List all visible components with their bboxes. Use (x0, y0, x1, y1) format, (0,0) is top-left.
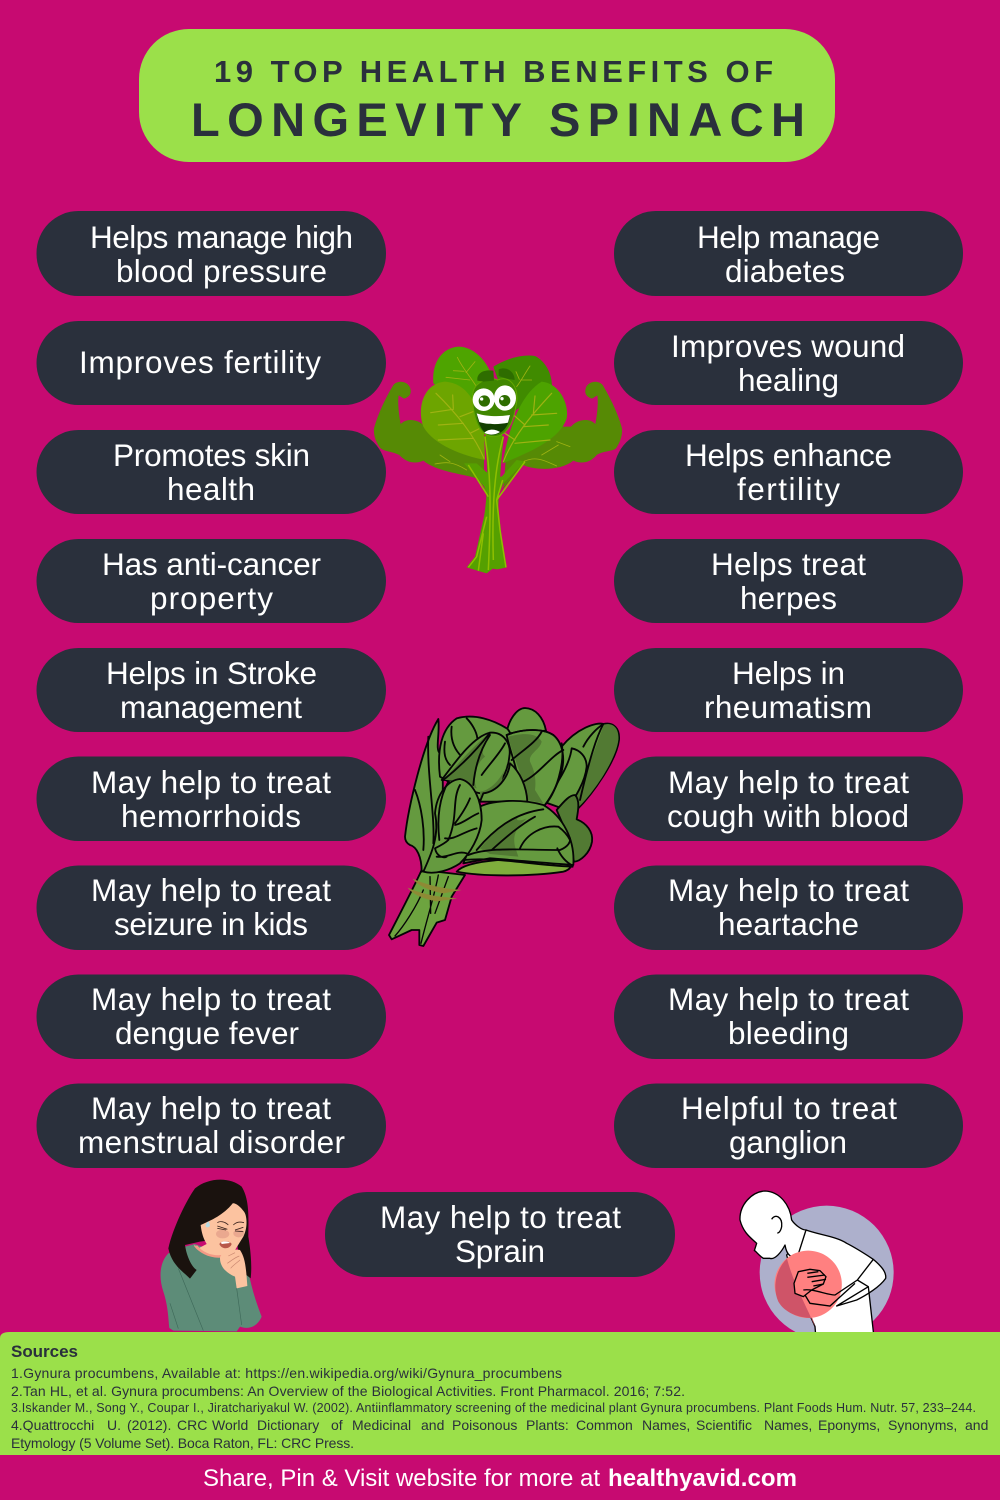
benefit: May help to treat dengue fever: dengue fever (115, 1015, 299, 1051)
benefit: Improves wound healing: healing (738, 362, 839, 398)
benefit: Improves fertility: Improves fertility (79, 344, 321, 380)
benefit: Helps in rheumatism: rheumatism (704, 689, 872, 725)
benefit: Improves wound healing: Improves wound (671, 328, 905, 364)
benefit: May help to treat seizure in kids (36, 866, 386, 950)
benefit: Helps enhance fertility: fertility (737, 471, 840, 507)
benefit: Helps in Stroke management: Helps in Stroke (106, 655, 317, 691)
reference 4: Medicinal (352, 1417, 411, 1433)
icon: flexing spinach mascot (374, 347, 622, 573)
benefit: May help to treat hemorrhoids: hemorrhoids (121, 798, 301, 834)
benefit: May help to treat heartache: May help to treat (668, 872, 909, 908)
benefit: Helps enhance fertility (614, 430, 963, 514)
reference 3: 3.Iskander M., Song Y., Coupar I., Jiratchariyakul W. (2002). Antiinflammatory screening of the medicinal plant Gynura procumbens. Plant Foods Hum. Nutr. 57, 233–244. (11, 1401, 976, 1415)
title banner: LONGEVITY SPINACH (191, 93, 805, 146)
reference 4: Scientific (696, 1417, 752, 1433)
benefit: May help to treat cough with blood (614, 756, 963, 841)
reference 4: and (421, 1417, 444, 1433)
reference 4: Eponyms, (818, 1417, 880, 1433)
reference 4: Names, (642, 1417, 690, 1433)
benefit: May help to treat seizure in kids: May help to treat (91, 872, 331, 908)
benefit: May help to treat heartache (614, 866, 963, 950)
icon: man with chest pain (740, 1191, 894, 1347)
reference 2: 2.Tan HL, et al. Gynura procumbens: An Overview of the Biological Activities. Front Pharmacol. 2016; 7:52. (11, 1383, 685, 1399)
benefit: Improves fertility (36, 321, 386, 405)
benefit: May help to treat hemorrhoids (36, 756, 386, 841)
reference 4: (2012). (127, 1417, 171, 1433)
benefit: May help to treat Sprain: Sprain (455, 1233, 545, 1269)
reference 4: of (331, 1417, 343, 1433)
benefit: May help to treat Sprain (325, 1192, 675, 1277)
title banner (139, 29, 835, 162)
benefit: Helps enhance fertility: Helps enhance (685, 437, 892, 473)
icon: spinach bunch (389, 708, 619, 946)
benefit: Helps in Stroke management: management (120, 689, 302, 725)
benefit: Helps in rheumatism: Helps in (732, 655, 845, 691)
benefit: Has anti-cancer property: Has anti-cancer (102, 546, 321, 582)
benefit: Helps treat herpes (614, 539, 963, 623)
benefit: Helps in Stroke management (36, 648, 386, 732)
benefit: Help manage diabetes: diabetes (725, 253, 845, 289)
reference 4: World (212, 1417, 248, 1433)
reference 4: Plants: (526, 1417, 569, 1433)
benefit: Promotes skin health: Promotes skin (113, 437, 310, 473)
footer call to action: healthyavid.com (608, 1465, 797, 1492)
benefit: Helpful to treat ganglion: ganglion (729, 1124, 847, 1160)
reference 4: and (965, 1417, 988, 1433)
benefit: May help to treat Sprain: May help to treat (380, 1199, 621, 1235)
reference 4: U. (107, 1417, 121, 1433)
benefit: Has anti-cancer property: property (150, 580, 273, 616)
benefit: Help manage diabetes: Help manage (697, 219, 880, 255)
reference 1: 1.Gynura procumbens, Available at: https://en.wikipedia.org/wiki/Gynura_procumbens (11, 1365, 562, 1381)
benefit: Helps manage high blood pressure: Helps manage high (90, 219, 353, 255)
benefit: May help to treat menstrual disorder: May help to treat (91, 1090, 331, 1126)
benefit: Has anti-cancer property (36, 539, 386, 623)
reference 4: CRC (177, 1417, 207, 1433)
benefit: May help to treat bleeding (614, 974, 963, 1059)
title banner: 19 TOP HEALTH BENEFITS OF (214, 54, 773, 89)
benefit: May help to treat cough with blood: cough with blood (667, 798, 909, 834)
reference 4: Dictionary (257, 1417, 319, 1433)
reference 4: Common (576, 1417, 633, 1433)
reference 4: Synonyms, (888, 1417, 957, 1433)
benefit: Help manage diabetes (614, 211, 963, 296)
reference 4 continued: Etymology (5 Volume Set). Boca Raton, FL: CRC Press. (11, 1435, 354, 1451)
benefit: Helps manage high blood pressure (36, 211, 386, 296)
panel: sources (0, 1332, 1000, 1455)
benefit: May help to treat cough with blood: May help to treat (668, 764, 909, 800)
benefit: Promotes skin health: health (167, 471, 255, 507)
sources heading: Sources (11, 1342, 78, 1361)
benefit: Helps manage high blood pressure: blood pressure (116, 253, 327, 289)
benefit: May help to treat dengue fever (36, 974, 386, 1059)
benefit: Helpful to treat ganglion: Helpful to treat (681, 1090, 897, 1126)
benefit: May help to treat menstrual disorder (36, 1084, 386, 1168)
benefit: May help to treat bleeding: bleeding (728, 1015, 849, 1051)
icon: woman coughing (161, 1180, 262, 1331)
benefit: May help to treat seizure in kids: seizure in kids (114, 906, 308, 942)
footer call to action (203, 1465, 797, 1492)
benefit: Promotes skin health (36, 430, 386, 514)
reference 4: Names, (764, 1417, 812, 1433)
benefit: Helps treat herpes: Helps treat (711, 546, 866, 582)
reference 4: Poisonous (452, 1417, 517, 1433)
benefit: Improves wound healing (614, 321, 963, 405)
benefit: May help to treat heartache: heartache (718, 906, 859, 942)
benefit: May help to treat menstrual disorder: menstrual disorder (78, 1124, 345, 1160)
reference 4: 4.Quattrocchi (11, 1417, 94, 1433)
benefit: Helps treat herpes: herpes (740, 580, 837, 616)
benefit: Helpful to treat ganglion (614, 1084, 963, 1168)
benefit: May help to treat hemorrhoids: May help to treat (91, 764, 331, 800)
benefit: Helps in rheumatism (614, 648, 963, 732)
benefit: May help to treat bleeding: May help to treat (668, 981, 909, 1017)
footer call to action: Share, Pin & Visit website for more at (203, 1465, 600, 1492)
benefit: May help to treat dengue fever: May help to treat (91, 981, 331, 1017)
